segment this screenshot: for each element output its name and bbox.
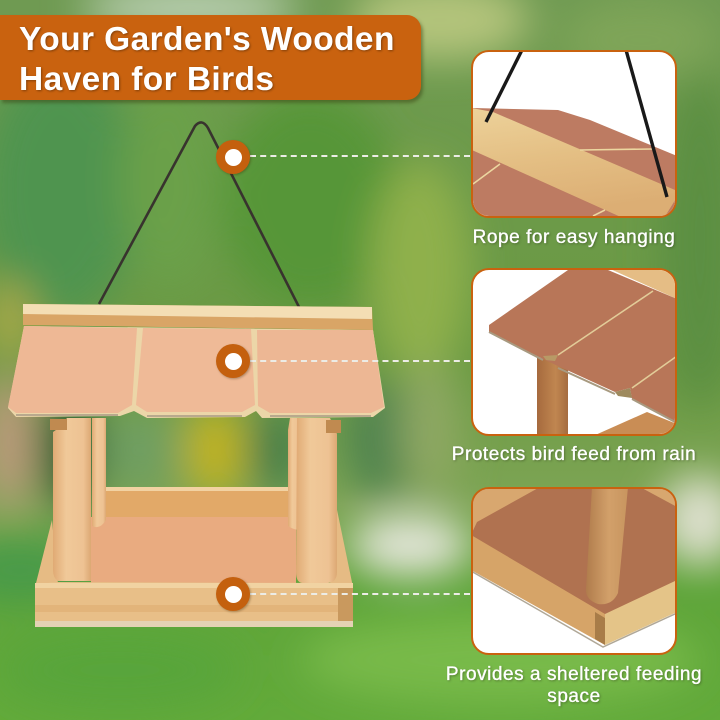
front posts xyxy=(50,418,341,583)
panel: tray detail xyxy=(471,487,677,655)
caption: roof: Protects bird feed from rain xyxy=(452,444,696,465)
tray floor xyxy=(91,517,296,584)
title banner: Your Garden's Wooden xyxy=(19,21,395,58)
hanging rope xyxy=(99,122,299,307)
title banner: Haven for Birds xyxy=(19,61,274,98)
caption: tray: space xyxy=(547,686,601,707)
tray back wall xyxy=(106,487,290,519)
marker: tray xyxy=(216,577,250,611)
callout line: rope xyxy=(250,155,470,157)
tray side walls xyxy=(35,505,353,587)
caption: tray: Provides a sheltered feeding xyxy=(446,664,702,685)
back posts xyxy=(92,418,300,530)
panel: rope detail xyxy=(471,50,677,218)
title banner xyxy=(0,15,421,100)
caption: rope: Rope for easy hanging xyxy=(473,227,675,248)
tray front wall xyxy=(35,582,353,627)
callout line: roof xyxy=(250,360,470,362)
callout line: tray xyxy=(250,593,470,595)
caption: tray xyxy=(446,664,702,708)
marker: rope xyxy=(216,140,250,174)
roof xyxy=(8,304,385,418)
panel: roof detail xyxy=(471,268,677,436)
marker: roof xyxy=(216,344,250,378)
